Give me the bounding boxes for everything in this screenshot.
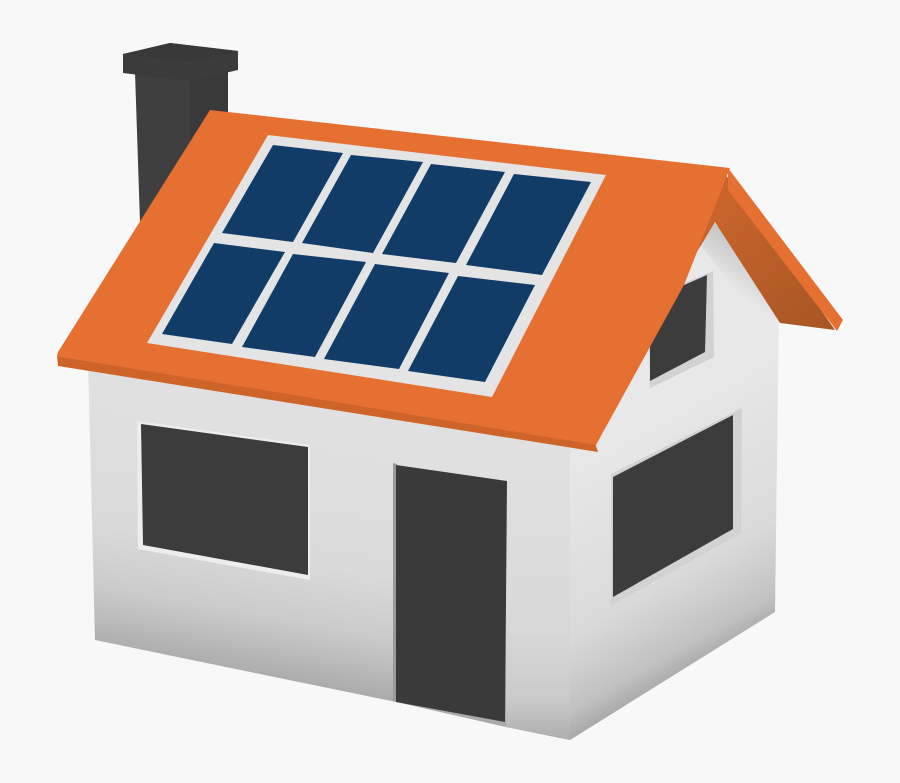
roof rim: gable edge <box>728 168 843 331</box>
window: side lower <box>611 408 742 606</box>
roof main face <box>57 110 730 445</box>
chimney <box>123 43 238 222</box>
window: side upper <box>648 271 714 388</box>
solar cells <box>162 145 591 382</box>
roof rim: front edge <box>57 356 598 452</box>
window: front <box>137 421 310 580</box>
roof <box>57 110 843 452</box>
panel frame <box>147 135 606 397</box>
door <box>393 463 507 722</box>
solar panel array <box>147 135 606 397</box>
roof underside: gable eave <box>680 170 835 330</box>
house walls <box>88 222 779 740</box>
